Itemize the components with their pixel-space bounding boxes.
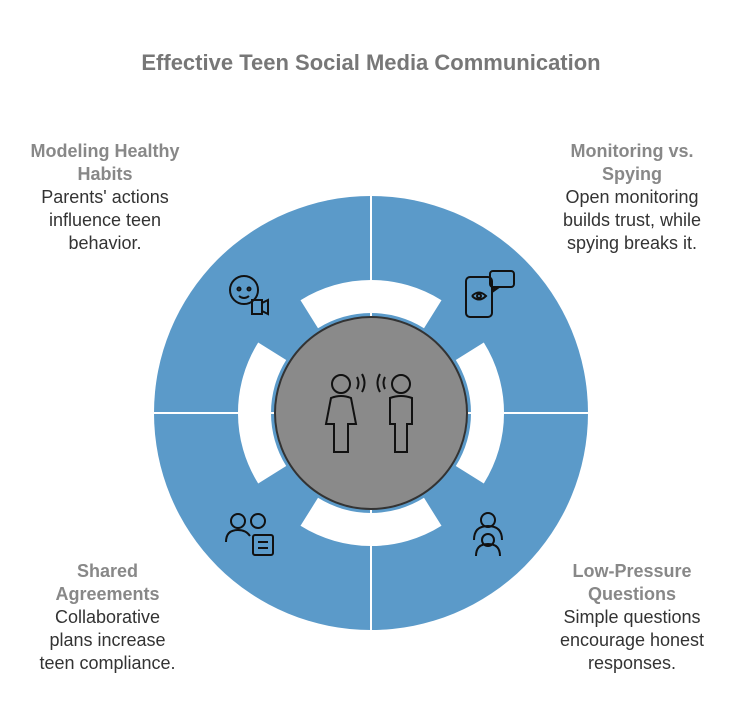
text: shared agreements: teen compliance. xyxy=(39,653,176,673)
text: shared agreements: plans increase xyxy=(49,630,166,650)
center circle with people icon xyxy=(275,317,467,509)
text: monitoring vs spying: Open monitoring xyxy=(565,187,699,207)
text: low-pressure questions: encourage honest xyxy=(560,630,704,650)
text: low-pressure questions xyxy=(560,561,704,673)
text: monitoring vs spying xyxy=(563,141,701,253)
text: modeling healthy habits: Modeling Healthy xyxy=(30,141,180,161)
title: Effective Teen Social Media Communication xyxy=(141,50,601,75)
text: monitoring vs spying: Monitoring vs. xyxy=(570,141,694,161)
text: monitoring vs spying: spying breaks it. xyxy=(567,233,697,253)
text: modeling healthy habits: Parents' actions xyxy=(41,187,169,207)
text: monitoring vs spying: Spying xyxy=(602,164,662,184)
text: low-pressure questions: Low-Pressure xyxy=(572,561,692,581)
icon: low-pressure questions xyxy=(474,513,502,556)
text: low-pressure questions: Simple questions xyxy=(563,607,701,627)
text: modeling healthy habits: Habits xyxy=(77,164,132,184)
text: monitoring vs spying: builds trust, while xyxy=(563,210,701,230)
ring xyxy=(154,196,588,630)
text: modeling healthy habits: influence teen xyxy=(49,210,161,230)
text: modeling healthy habits xyxy=(30,141,180,253)
text: low-pressure questions: Questions xyxy=(588,584,676,604)
icon: phone monitoring xyxy=(466,271,514,317)
text: shared agreements xyxy=(39,561,176,673)
icon: shared agreements xyxy=(226,514,273,555)
text: low-pressure questions: responses. xyxy=(588,653,676,673)
text: shared agreements: Agreements xyxy=(55,584,160,604)
text: shared agreements: Shared xyxy=(77,561,138,581)
icon: baby modeling xyxy=(230,276,268,314)
text: modeling healthy habits: behavior. xyxy=(68,233,142,253)
text: shared agreements: Collaborative xyxy=(55,607,160,627)
